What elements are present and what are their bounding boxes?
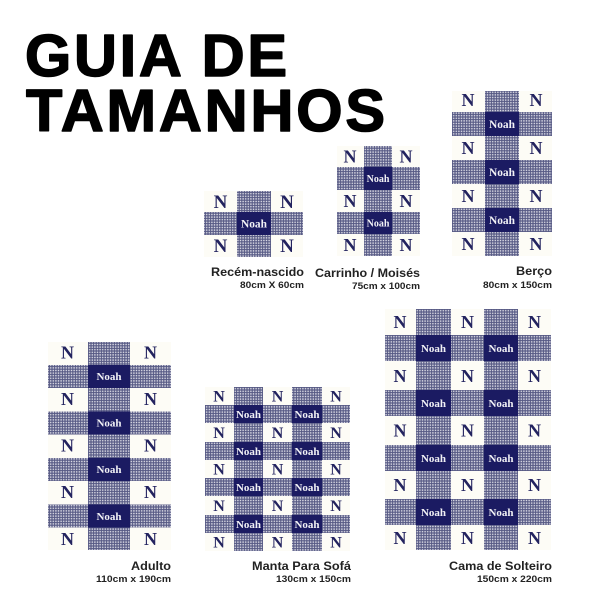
N monograms: N	[528, 420, 541, 440]
N monograms: N	[213, 462, 225, 478]
size label: Recém-nascido	[211, 265, 304, 279]
panel: Manta Para Sofá	[205, 387, 351, 585]
Noah labels: Noah	[489, 167, 516, 179]
N monograms: N	[462, 234, 474, 254]
N monograms: N	[213, 498, 225, 515]
Noah labels: Noah	[489, 119, 516, 131]
N monograms: N	[394, 420, 406, 440]
Noah labels	[421, 343, 514, 519]
N monograms: N	[528, 312, 541, 332]
N monograms: N	[144, 389, 157, 409]
N monograms: N	[530, 234, 542, 254]
N monograms: N	[272, 388, 284, 406]
plaid bands	[337, 146, 420, 256]
Noah labels: Noah	[96, 371, 122, 383]
panel: Berço	[452, 90, 552, 291]
N monograms: N	[461, 366, 474, 386]
Noah labels: Noah	[236, 446, 261, 458]
N monograms: N	[213, 534, 225, 552]
N monograms: N	[280, 236, 294, 257]
N monograms: N	[461, 312, 474, 332]
Noah labels: Noah	[421, 343, 446, 355]
size label: Adulto	[131, 559, 171, 573]
N monograms: N	[330, 425, 342, 442]
Noah labels: Noah	[96, 511, 122, 523]
N monograms: N	[530, 186, 542, 206]
size label: Berço	[516, 264, 552, 278]
N monograms: N	[394, 528, 406, 548]
N monograms: N	[530, 138, 542, 158]
size label	[211, 265, 304, 291]
N monograms	[344, 146, 412, 255]
Noah labels: Noah	[488, 507, 514, 519]
N monograms: N	[462, 138, 474, 158]
N monograms: N	[528, 475, 541, 495]
panel: Recém-nascido	[204, 191, 304, 291]
N monograms: N	[144, 342, 157, 362]
size label	[96, 559, 171, 585]
size label: 80cm X 60cm	[240, 280, 304, 291]
Noah labels: Noah	[421, 453, 446, 465]
plaid bands	[205, 387, 350, 551]
Noah labels	[96, 371, 122, 523]
N monograms: N	[280, 192, 294, 213]
N monograms: N	[144, 529, 157, 549]
N monograms: N	[330, 498, 342, 515]
Noah labels: Noah	[96, 418, 122, 430]
title: GUIA DE	[25, 22, 287, 89]
Noah labels: Noah	[421, 398, 446, 410]
N monograms: N	[144, 436, 157, 456]
size label	[483, 264, 552, 291]
N monograms: N	[461, 420, 474, 440]
plaid bands	[48, 342, 171, 550]
Noah labels: Noah	[294, 519, 320, 531]
N monograms: N	[344, 235, 356, 255]
Noah labels	[489, 119, 516, 227]
N monograms: N	[462, 90, 474, 110]
N monograms: N	[461, 528, 474, 548]
N monograms: N	[61, 529, 74, 549]
N monograms: N	[272, 425, 284, 442]
N monograms: N	[61, 436, 74, 456]
N monograms: N	[61, 389, 74, 409]
N monograms: N	[394, 366, 406, 386]
size label: 75cm x 100cm	[352, 281, 420, 292]
N monograms	[214, 192, 294, 257]
Noah labels: Noah	[488, 343, 514, 355]
N monograms: N	[214, 236, 228, 257]
N monograms: N	[400, 191, 412, 211]
Noah labels: Noah	[421, 507, 446, 519]
title: TAMANHOS	[26, 77, 385, 144]
size label: 80cm x 150cm	[483, 280, 552, 291]
N monograms: N	[213, 388, 225, 406]
N monograms	[462, 90, 542, 254]
N monograms: N	[528, 366, 541, 386]
Noah labels: Noah	[367, 174, 390, 185]
Noah labels: Noah	[367, 218, 390, 230]
panel: Carrinho / Moisés	[315, 146, 420, 292]
size label: 130cm x 150cm	[276, 574, 351, 585]
panel: Cama de Solteiro	[385, 309, 552, 585]
N monograms: N	[530, 90, 542, 110]
size label: Carrinho / Moisés	[315, 266, 420, 280]
N monograms: N	[272, 498, 284, 515]
N monograms: N	[400, 235, 412, 255]
N monograms: N	[61, 482, 74, 502]
Noah labels: Noah	[96, 464, 122, 476]
Noah label: Noah	[241, 218, 268, 230]
N monograms: N	[330, 462, 342, 478]
N monograms	[213, 388, 342, 552]
size label	[252, 559, 351, 585]
Noah labels: Noah	[236, 409, 261, 421]
N monograms: N	[461, 475, 474, 495]
Noah labels: Noah	[236, 519, 261, 531]
Noah labels: Noah	[294, 409, 320, 421]
size label: Manta Para Sofá	[252, 559, 351, 573]
N monograms	[61, 342, 157, 549]
N monograms: N	[330, 388, 342, 406]
N monograms: N	[344, 146, 356, 166]
title	[25, 22, 385, 144]
N monograms: N	[144, 482, 157, 502]
Noah labels: Noah	[488, 453, 514, 465]
N monograms: N	[344, 191, 356, 211]
N monograms: N	[462, 186, 474, 206]
Noah labels	[236, 409, 320, 531]
size label	[315, 266, 420, 292]
N monograms: N	[61, 342, 74, 362]
Noah labels: Noah	[294, 482, 320, 494]
N monograms: N	[272, 462, 284, 478]
size label: Cama de Solteiro	[449, 559, 552, 573]
panel: Adulto	[48, 342, 171, 585]
N monograms	[394, 312, 541, 548]
Noah labels	[367, 174, 390, 230]
N monograms: N	[394, 312, 406, 332]
N monograms: N	[528, 528, 541, 548]
Noah labels: Noah	[294, 446, 320, 458]
plaid bands	[385, 309, 551, 550]
plaid bands	[204, 191, 303, 257]
Noah labels: Noah	[488, 398, 514, 410]
N monograms: N	[213, 425, 225, 442]
plaid bands	[452, 91, 552, 256]
N monograms: N	[272, 534, 284, 552]
Noah labels: Noah	[489, 215, 516, 227]
size label: 150cm x 220cm	[477, 574, 552, 585]
N monograms: N	[214, 192, 228, 213]
N monograms: N	[330, 534, 342, 552]
size label	[449, 559, 552, 585]
Noah labels: Noah	[236, 482, 261, 494]
N monograms: N	[394, 475, 406, 495]
N monograms: N	[400, 146, 412, 166]
size label: 110cm x 190cm	[96, 574, 171, 585]
